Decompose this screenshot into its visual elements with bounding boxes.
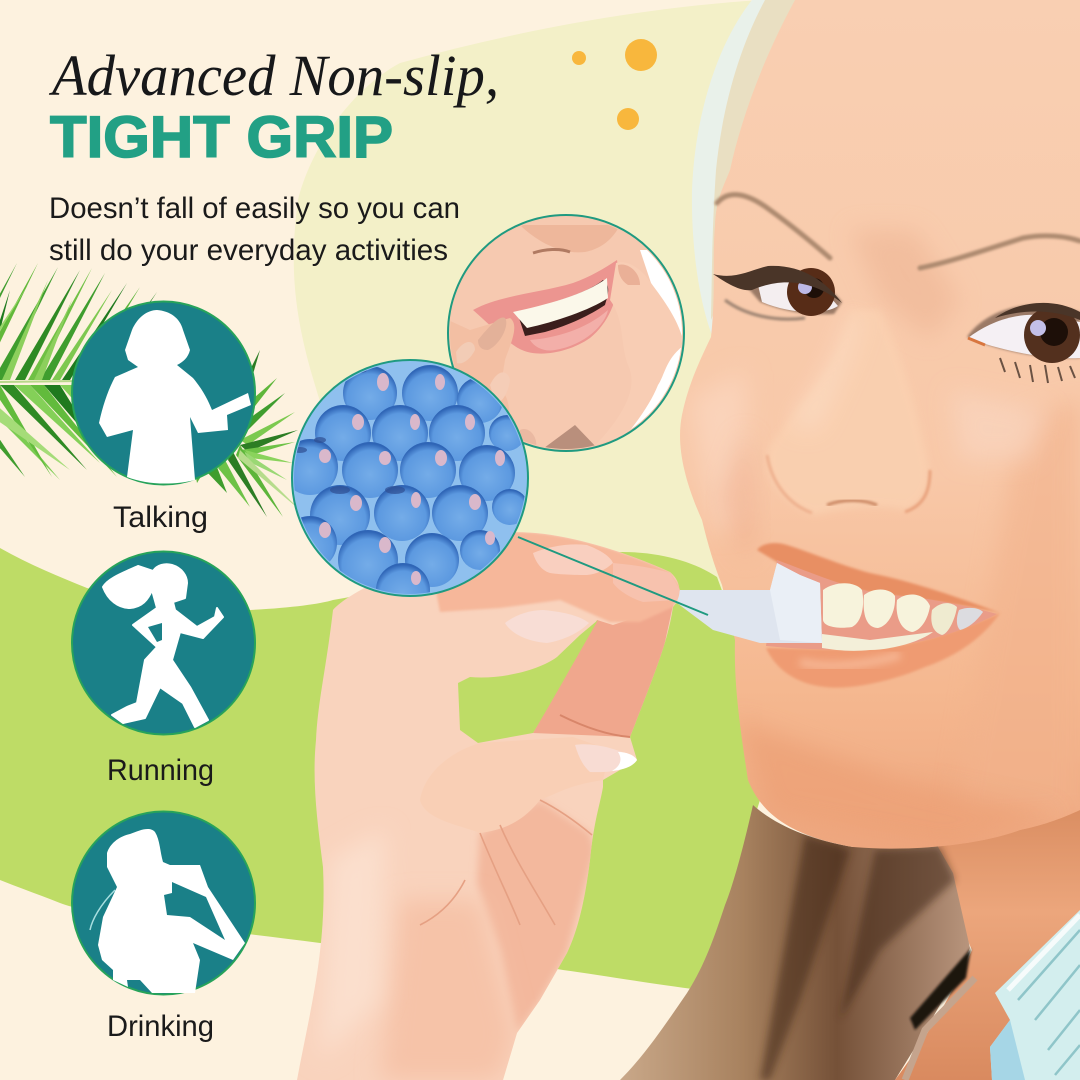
eyebrows [717, 195, 1080, 268]
hair: pale strand at top [692, 0, 800, 345]
green wave band [0, 548, 760, 990]
fingernails [533, 544, 613, 575]
description: still do your everyday activities [49, 234, 448, 267]
lower finger [432, 765, 538, 832]
title: TIGHT GRIP [50, 105, 393, 170]
mouth interior [766, 560, 997, 650]
lower-left fronds [0, 385, 117, 480]
upper-left fronds [0, 263, 157, 380]
circle: blue gel balls [291, 359, 529, 597]
neck [895, 800, 1080, 1080]
frond stem [0, 381, 80, 382]
lips [473, 260, 618, 354]
hand [290, 525, 690, 1080]
hand shading [477, 800, 595, 1033]
orange dots [572, 39, 657, 130]
label: running: Running [107, 754, 214, 787]
pale yellow blob [294, 0, 780, 610]
icon: drinking [72, 812, 255, 994]
icon: talking [72, 302, 255, 484]
hair: long brown [620, 805, 971, 1080]
upper teeth [823, 583, 983, 635]
title: Advanced Non-slip, [48, 43, 499, 108]
right eye [967, 303, 1080, 383]
upper lip [757, 543, 1000, 613]
necklace strap [905, 978, 975, 1080]
upper fingers [430, 532, 682, 622]
title [48, 43, 499, 170]
label: drinking: Drinking [107, 1010, 214, 1043]
face shading [1002, 406, 1080, 606]
lower teeth [822, 632, 933, 651]
icon: running [72, 552, 255, 734]
thumb [533, 605, 673, 737]
fingers, left [450, 318, 514, 412]
whitening strip [610, 563, 822, 643]
mouth [757, 543, 1000, 688]
left eye [713, 266, 842, 319]
nose [778, 474, 922, 512]
callout line [518, 537, 708, 615]
finger, right [610, 262, 682, 439]
gap between fingers [458, 620, 598, 743]
circle: smile photo [448, 215, 690, 455]
label: talking: Talking [113, 501, 208, 534]
palm leaves [0, 263, 300, 517]
face [660, 0, 1080, 860]
right fronds [195, 350, 300, 517]
description [49, 192, 460, 267]
clothing collar [990, 910, 1080, 1080]
lower lip [766, 613, 1000, 688]
description: Doesn’t fall of easily so you can [49, 192, 460, 225]
